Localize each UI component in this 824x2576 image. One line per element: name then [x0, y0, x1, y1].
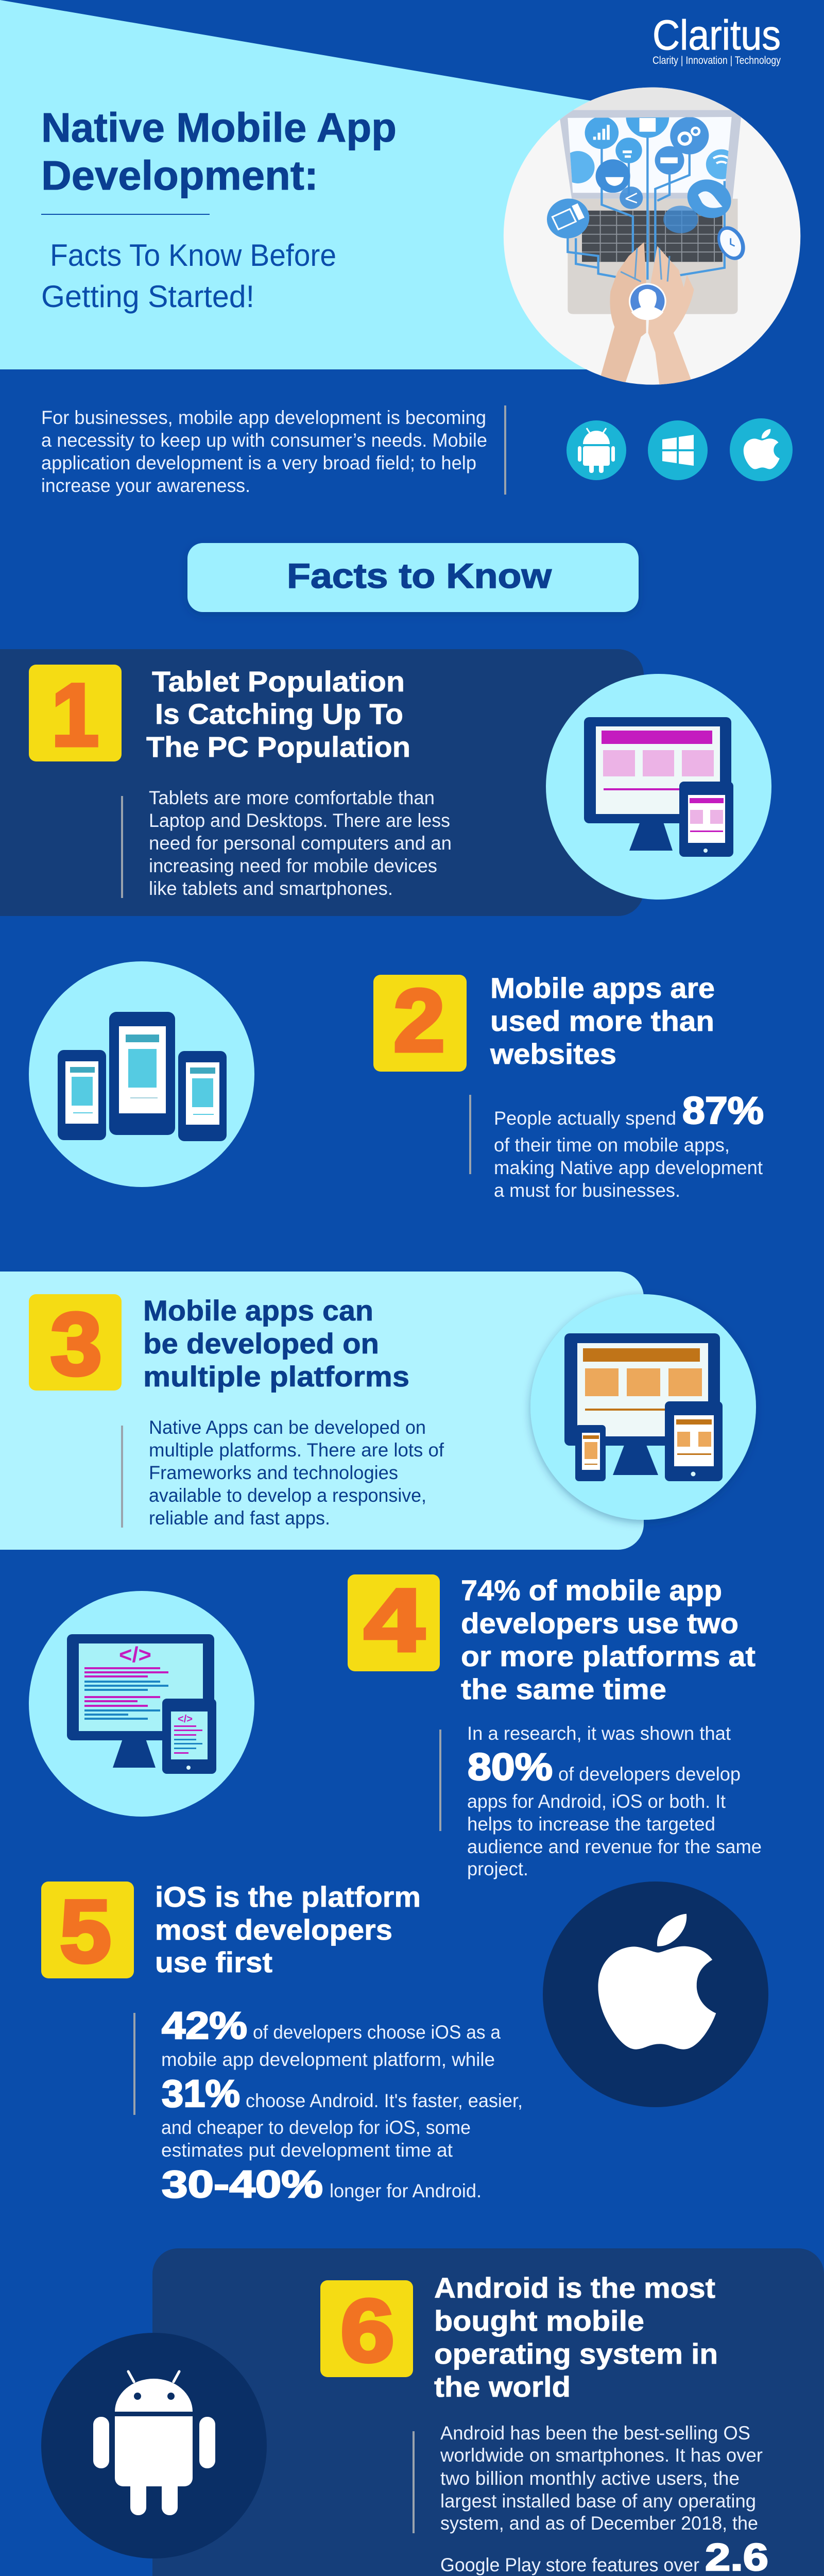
- badge 5: [41, 1882, 134, 1981]
- heading: tablet population: Is Catching Up To: [155, 698, 403, 730]
- body text with 87%: a must for businesses.: [494, 1180, 680, 1201]
- body text with 42%, 31%, 30-40%: mobile app development platform, while: [161, 2049, 495, 2070]
- icon: code on monitor and phone: </>: [178, 1714, 193, 1725]
- body text with 2.6 million: Android has been the best-selling OS: [440, 2422, 750, 2444]
- body text with 42%, 31%, 30-40%: choose Android. It's faster, easier,: [246, 2090, 523, 2111]
- body text: increasing need for mobile devices: [149, 855, 437, 876]
- header banner: [0, 0, 781, 369]
- body text with 87%: 87%: [682, 1089, 764, 1132]
- heading: iOS first: use first: [155, 1946, 272, 1978]
- heading: 74% of developers: developers use two: [461, 1607, 739, 1639]
- heading: android most bought: bought mobile: [434, 2304, 644, 2337]
- panel: fact 6: [152, 2248, 824, 2576]
- icon: code on monitor and phone: </>: [119, 1642, 151, 1667]
- body text: need for personal computers and an: [149, 833, 452, 854]
- intro text: application development is a very broad field; to help: [41, 452, 476, 473]
- badge 2: [373, 971, 467, 1072]
- body text: [149, 787, 452, 899]
- heading: mobile apps are used more: Mobile apps are: [490, 972, 715, 1004]
- icon: android robot: [41, 2333, 267, 2558]
- badge 3: 3: [50, 1295, 102, 1394]
- heading: iOS first: most developers: [155, 1913, 392, 1946]
- body text with 42%, 31%, 30-40%: longer for Android.: [330, 2180, 482, 2201]
- title: Native Mobile App: [41, 105, 397, 150]
- body text with 80%: helps to increase the targeted: [467, 1814, 715, 1835]
- logo: Claritus: Claritus: [653, 12, 781, 59]
- badge 3: [29, 1294, 122, 1394]
- body text with 42%, 31%, 30-40%: 30-40%: [162, 2163, 323, 2206]
- body text: [149, 1417, 444, 1529]
- heading: 74% of developers: or more platforms at: [461, 1640, 756, 1672]
- heading: developed on multiple platforms: Mobile apps can: [143, 1294, 373, 1327]
- body text with 80%: 80%: [468, 1745, 553, 1788]
- body text with 80%: project.: [467, 1858, 528, 1879]
- body text: reliable and fast apps.: [149, 1507, 330, 1529]
- badge 1: 1: [52, 666, 99, 765]
- heading: android most bought: [434, 2272, 718, 2403]
- heading: mobile apps are used more: websites: [490, 1038, 616, 1070]
- body text: multiple platforms. There are lots of: [149, 1439, 444, 1461]
- body text with 80%: apps for Android, iOS or both. It: [467, 1791, 726, 1812]
- body text with 2.6 million: [440, 2422, 768, 2576]
- icon: apple: [730, 418, 793, 481]
- intro text: For businesses, mobile app development is becoming: [41, 407, 486, 428]
- body text with 2.6 million: worldwide on smartphones. It has over: [440, 2445, 763, 2466]
- body text with 2.6 million: two billion monthly active users, the: [440, 2468, 740, 2489]
- icon: android: [566, 420, 626, 480]
- body text with 2.6 million: system, and as of December 2018, the: [440, 2513, 758, 2534]
- heading button: Facts to Know: [187, 543, 639, 612]
- body text with 42%, 31%, 30-40%: 31%: [162, 2072, 240, 2115]
- badge 6: [320, 2280, 413, 2380]
- heading: tablet population: Tablet Population: [152, 665, 405, 698]
- intro text: [41, 407, 487, 496]
- badge 1: [29, 665, 122, 765]
- heading: 74% of developers: 74% of mobile app: [461, 1574, 722, 1606]
- badge 2: 2: [393, 971, 445, 1070]
- body text with 80%: [467, 1723, 762, 1879]
- heading: mobile apps are used more: used more than: [490, 1005, 714, 1037]
- body text with 42%, 31%, 30-40%: 42%: [162, 2004, 247, 2047]
- panel: fact 3: [0, 1272, 644, 1550]
- body text: Laptop and Desktops. There are less: [149, 810, 450, 831]
- subtitle: [41, 238, 336, 314]
- icon: three phones: [29, 961, 254, 1187]
- body text: Native Apps can be developed on: [149, 1417, 426, 1438]
- heading: developed on multiple platforms: [143, 1294, 409, 1393]
- heading: android most bought: operating system in: [434, 2337, 718, 2370]
- subtitle: Getting Started!: [41, 279, 254, 314]
- body text with 80%: audience and revenue for the same: [467, 1836, 762, 1857]
- intro text: a necessity to keep up with consumer’s needs. Mobile: [41, 430, 487, 451]
- body text with 42%, 31%, 30-40%: and cheaper to develop for iOS, some: [161, 2117, 471, 2138]
- heading: iOS first: [155, 1880, 421, 1978]
- heading button: Facts to Know: Facts to Know: [287, 556, 552, 596]
- body text with 80%: of developers develop: [558, 1764, 741, 1785]
- title: [41, 105, 397, 198]
- heading: mobile apps are used more: [490, 972, 715, 1070]
- logo: Claritus: Clarity | Innovation | Technology: [653, 55, 781, 66]
- icon: code on monitor and phone: [29, 1591, 254, 1817]
- body text: like tablets and smartphones.: [149, 878, 393, 899]
- body text with 80%: In a research, it was shown that: [467, 1723, 731, 1744]
- heading: android most bought: the world: [434, 2370, 571, 2403]
- badge 4: [348, 1571, 440, 1671]
- body text with 2.6 million: Google Play store features over: [440, 2554, 699, 2575]
- body text with 42%, 31%, 30-40%: [161, 2004, 523, 2206]
- heading: developed on multiple platforms: be developed on: [143, 1327, 379, 1360]
- body text with 2.6 million: largest installed base of any operating: [440, 2490, 756, 2512]
- icon: multi-platform devices: [530, 1294, 756, 1520]
- panel: fact 1: [0, 649, 644, 916]
- body text with 42%, 31%, 30-40%: of developers choose iOS as a: [253, 2022, 501, 2043]
- body text with 42%, 31%, 30-40%: estimates put development time at: [161, 2140, 453, 2161]
- icon: apple logo: [543, 1882, 768, 2107]
- body text: Frameworks and technologies: [149, 1462, 398, 1483]
- body text with 87%: making Native app development: [494, 1157, 763, 1178]
- icon: monitor and phone: [546, 674, 771, 900]
- badge 4: 4: [364, 1571, 424, 1670]
- heading: developed on multiple platforms: multiple platforms: [143, 1360, 409, 1393]
- heading: android most bought: Android is the most: [434, 2272, 715, 2304]
- intro text: increase your awareness.: [41, 475, 250, 496]
- body text with 87%: [494, 1089, 764, 1201]
- body text: Tablets are more comfortable than: [149, 787, 435, 808]
- icon: windows: [648, 420, 708, 480]
- heading: tablet population: The PC Population: [146, 731, 410, 763]
- hero photo: hands and laptop with app icons: [494, 82, 814, 385]
- heading: 74% of developers: the same time: [461, 1673, 666, 1705]
- heading: 74% of developers: [461, 1574, 756, 1705]
- heading: iOS first: iOS is the platform: [155, 1880, 421, 1913]
- title: Development:: [41, 152, 318, 198]
- heading: tablet population: [146, 665, 410, 763]
- body text with 87%: of their time on mobile apps,: [494, 1134, 730, 1156]
- body text with 87%: People actually spend: [494, 1108, 676, 1129]
- subtitle: Facts To Know Before: [50, 238, 336, 273]
- badge 6: 6: [340, 2281, 394, 2380]
- badge 5: 5: [60, 1882, 111, 1981]
- body text: available to develop a responsive,: [149, 1485, 426, 1506]
